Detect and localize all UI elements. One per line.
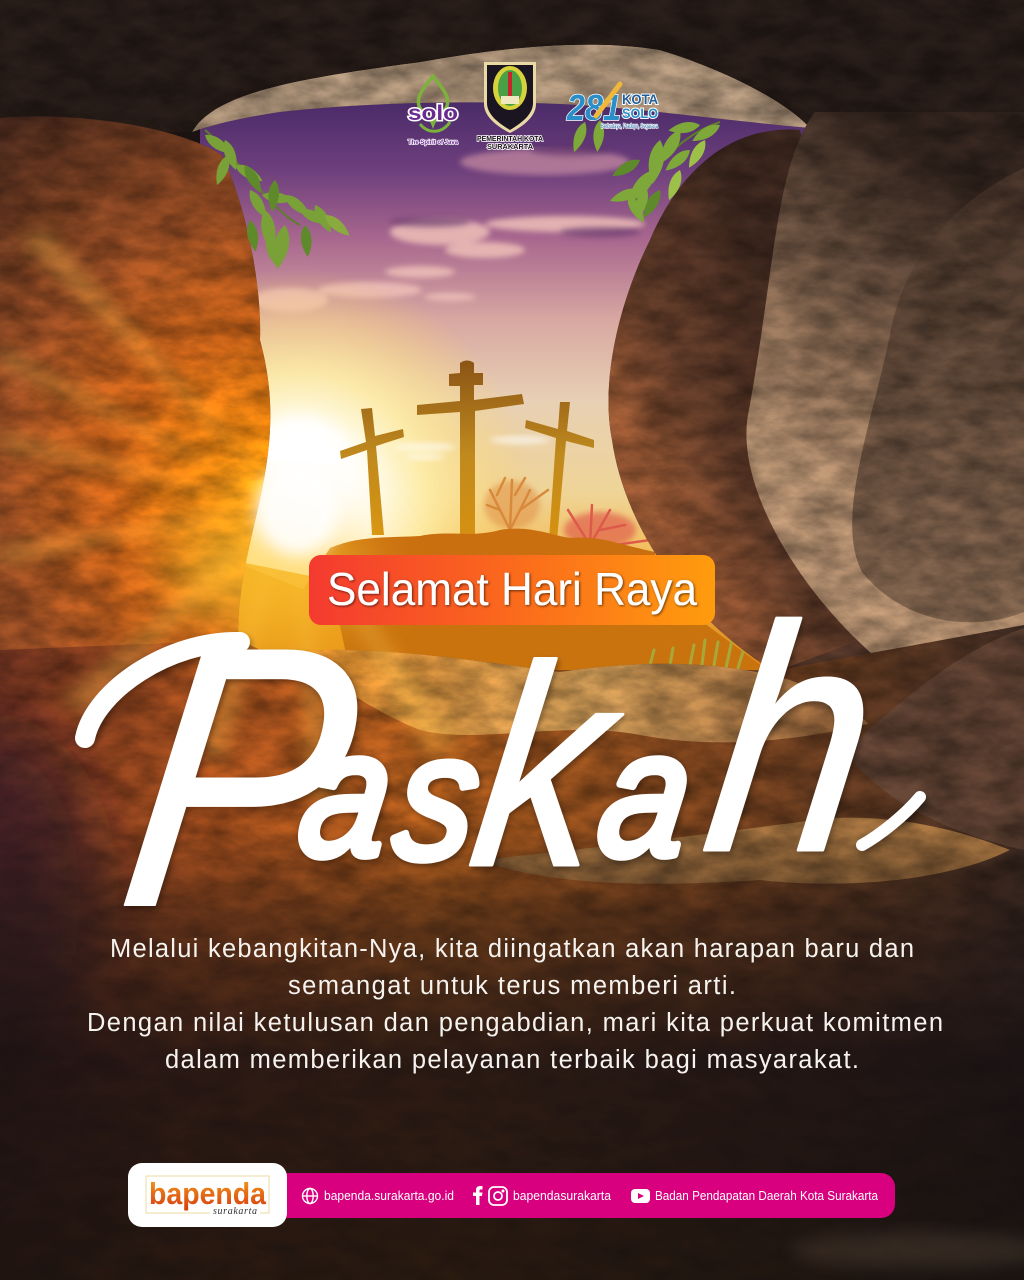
message text: dalam memberikan pelayanan terbaik bagi masyarakat.	[165, 1046, 859, 1074]
title: Paskah	[85, 562, 920, 984]
sky through tomb opening	[200, 90, 840, 690]
banner text: Selamat Hari Raya	[327, 563, 697, 615]
logo: Solo The Spirit of Java	[408, 76, 458, 146]
logo: Pemerintah Kota Surakarta shield	[477, 62, 543, 151]
warm rays	[0, 228, 460, 800]
title lettering: a	[589, 693, 704, 893]
bapenda logo card: surakarta	[213, 1206, 257, 1217]
leaves right	[569, 120, 723, 225]
logo: 281 Kota Solo	[566, 84, 658, 130]
round sealing stone	[608, 130, 860, 672]
logo: Solo The Spirit of Java: solo	[408, 102, 458, 125]
lit stone mound	[290, 650, 868, 742]
title lettering: k	[457, 608, 639, 926]
lower right boulder	[845, 628, 1024, 850]
left boulder	[0, 116, 270, 675]
icon: facebook	[473, 1186, 482, 1205]
message text: semangat untuk terus memberi arti.	[288, 972, 736, 1000]
bapenda logo card	[128, 1163, 287, 1227]
rock shadow under right side	[785, 590, 1024, 730]
message text: Dengan nilai ketulusan dan pengabdian, mari kita perkuat komitmen	[87, 1009, 943, 1037]
bapenda logo card: bapenda	[149, 1176, 267, 1211]
sun flare over rock edge	[170, 464, 370, 630]
title lettering: s	[385, 696, 491, 896]
bottom darkness	[0, 820, 1024, 1280]
logo: 281 Kota Solo: Berbudaya, Pradoyo, Segarasa	[601, 124, 658, 130]
title lettering: a	[290, 693, 405, 893]
purple left shade	[0, 730, 100, 1070]
hill	[270, 529, 660, 640]
sun glow	[70, 270, 530, 730]
logos	[408, 62, 658, 151]
greeting banner	[309, 555, 715, 625]
lower rock base	[0, 625, 1024, 1280]
right boulder	[746, 112, 1024, 665]
three crosses	[340, 360, 594, 540]
bare trees	[484, 478, 650, 548]
logo: 281 Kota Solo: KOTA	[622, 91, 658, 107]
grass field	[230, 560, 770, 672]
lit ledge	[480, 818, 1010, 884]
tomb ceiling	[0, 0, 1024, 135]
stone lintel	[192, 45, 810, 132]
website: bapenda.surakarta.go.id	[324, 1189, 454, 1203]
message text: Melalui kebangkitan-Nya, kita diingatkan akan harapan baru dan	[110, 935, 914, 963]
leaves left	[202, 130, 353, 270]
bottom light patch	[790, 1232, 1024, 1268]
icon: youtube	[631, 1189, 650, 1203]
logo: Pemerintah Kota Surakarta shield: PEMERINTAH KOTA	[477, 136, 543, 143]
icon: globe	[302, 1188, 318, 1204]
far right boulder	[852, 168, 1024, 622]
instagram handle: bapendasurakarta	[513, 1189, 611, 1203]
logo: 281 Kota Solo: 281	[566, 87, 621, 128]
footer	[128, 1163, 895, 1227]
logo: Solo The Spirit of Java: The Spirit of Java	[408, 139, 458, 146]
title lettering: h	[690, 562, 897, 919]
title flourishes	[85, 642, 920, 845]
title lettering: P	[104, 571, 380, 984]
distant clouds	[395, 436, 550, 460]
message text	[87, 935, 943, 1074]
logo: Pemerintah Kota Surakarta shield: SURAKARTA	[487, 144, 533, 151]
logo: 281 Kota Solo: SOLO	[622, 105, 658, 121]
footer contact bar	[270, 1173, 895, 1218]
icon: instagram	[489, 1187, 507, 1205]
youtube channel: Badan Pendapatan Daerah Kota Surakarta	[655, 1189, 878, 1203]
